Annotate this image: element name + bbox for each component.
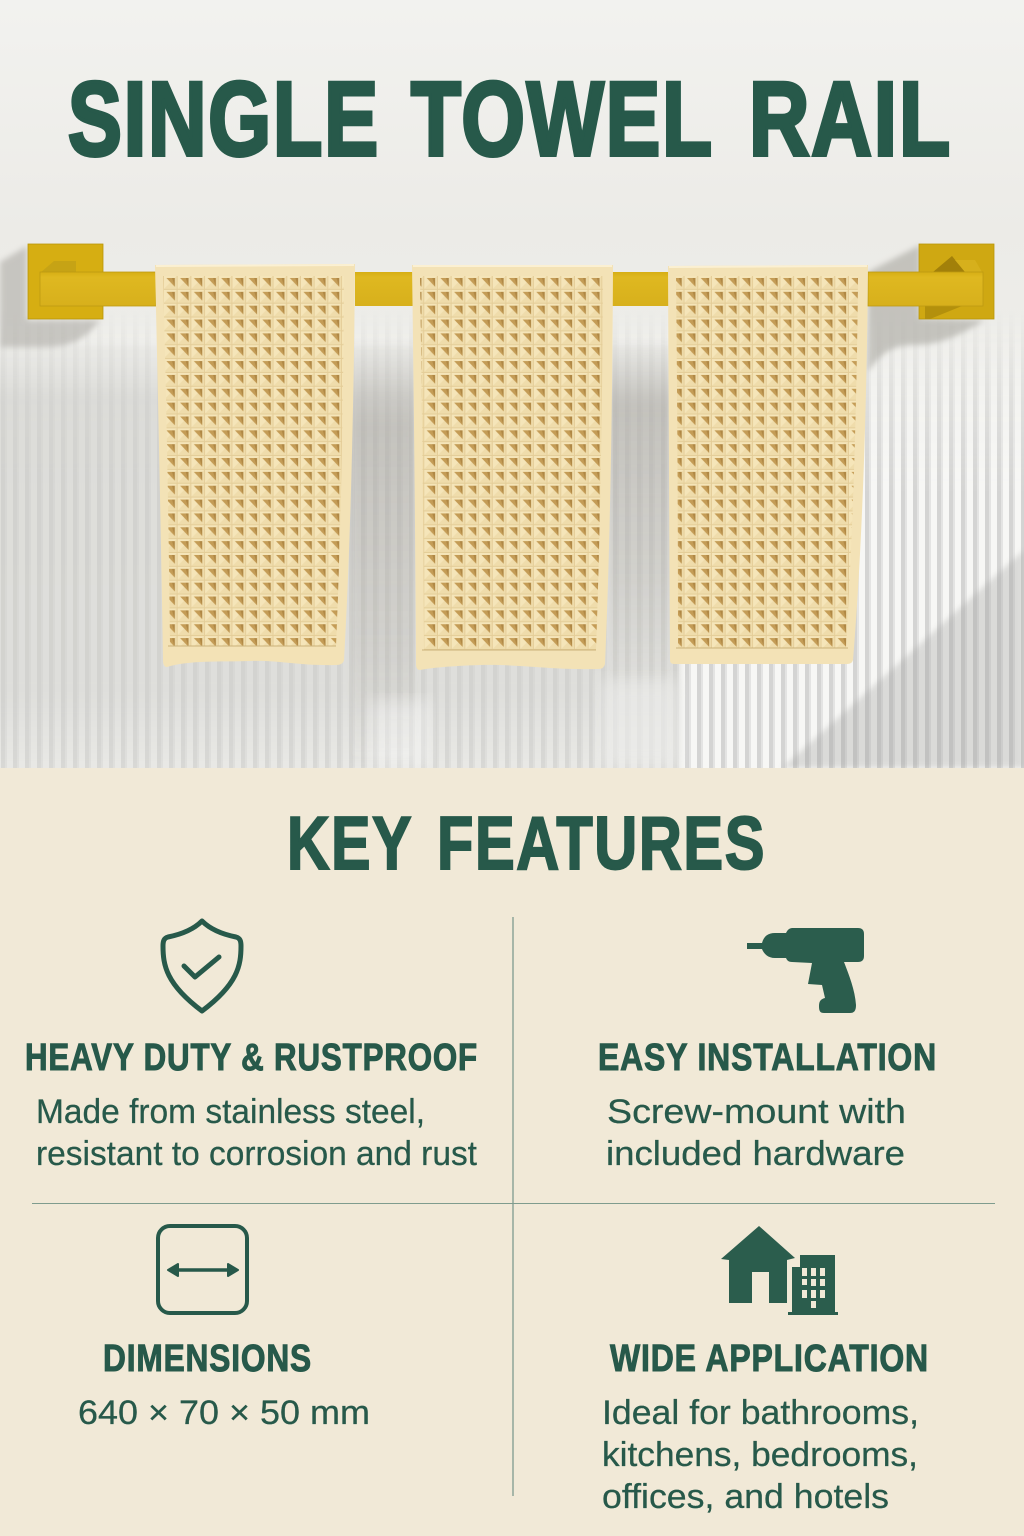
towel 1 [155, 264, 355, 667]
feature: wide application [602, 1226, 929, 1516]
towel 3 [668, 265, 868, 664]
description: offices, and hotels [602, 1478, 889, 1516]
icon: house and building [721, 1226, 838, 1315]
description: kitchens, bedrooms, [602, 1436, 918, 1474]
heading: key features: KEY [287, 801, 413, 885]
heading: EASY INSTALLATION [598, 1037, 937, 1079]
towel rail [28, 244, 994, 319]
panel: key features [0, 768, 1024, 1536]
right bracket shadow [868, 245, 985, 372]
description: included hardware [606, 1135, 905, 1173]
feature: easy installation [598, 928, 937, 1173]
towel 2 [412, 265, 613, 670]
description: Screw-mount with [607, 1093, 906, 1131]
title: SINGLE [68, 61, 380, 178]
title: RAIL [749, 61, 952, 178]
icon: shield with check [163, 921, 241, 1011]
title: TOWEL [411, 61, 714, 178]
description: Made from stainless steel, [36, 1093, 425, 1131]
description: Ideal for bathrooms, [602, 1394, 919, 1432]
feature: heavy duty and rustproof [25, 921, 478, 1173]
left bracket shadow [0, 246, 100, 347]
icon: drill [747, 928, 864, 1013]
description: 640 × 70 × 50 mm [78, 1394, 370, 1432]
heading: DIMENSIONS [103, 1338, 312, 1380]
heading: key features [287, 801, 766, 885]
title [68, 61, 952, 178]
photo: towel rail on ribbed wall [0, 0, 1024, 778]
right wall plate [919, 244, 994, 319]
left wall plate [28, 244, 103, 319]
heading: HEAVY DUTY & RUSTPROOF [25, 1037, 478, 1079]
feature: dimensions [78, 1226, 370, 1432]
icon: width arrow in rounded square [158, 1226, 247, 1313]
heading: WIDE APPLICATION [610, 1338, 929, 1380]
heading: key features: FEATURES [437, 801, 766, 885]
description: resistant to corrosion and rust [36, 1135, 478, 1173]
